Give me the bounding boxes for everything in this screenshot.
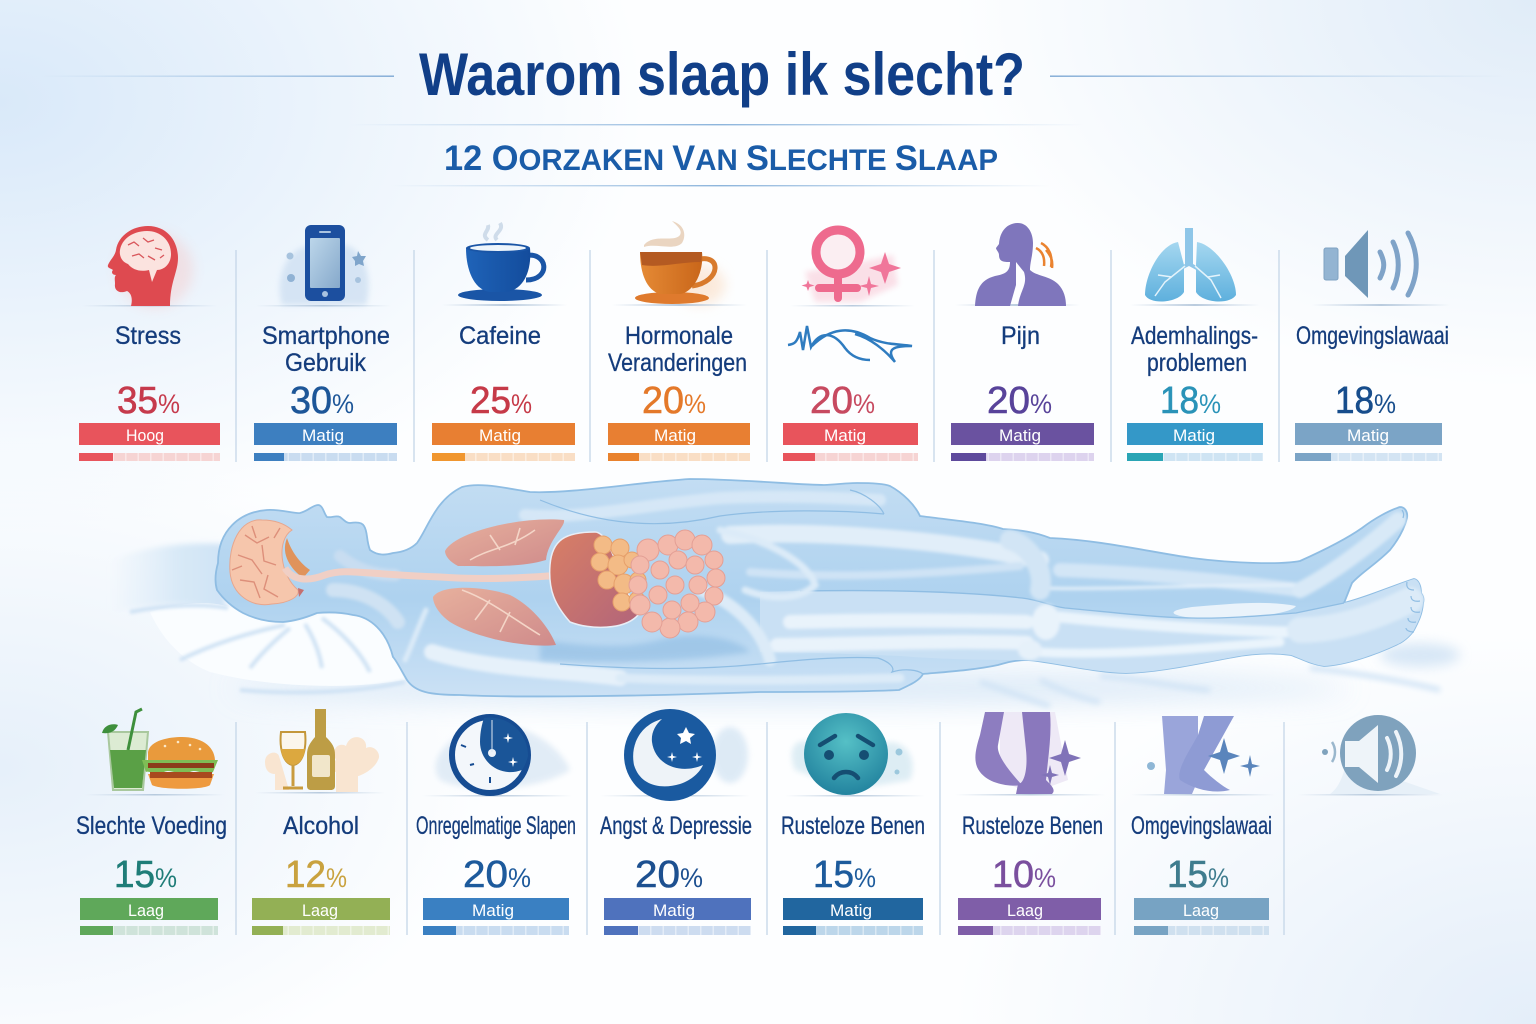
severity bar: Matig bbox=[479, 427, 521, 445]
percentage: 20 bbox=[810, 380, 853, 422]
severity bar: Laag bbox=[128, 902, 164, 920]
stomach bbox=[591, 536, 646, 611]
icon: female symbol bbox=[802, 230, 901, 298]
panel: smartphone bbox=[254, 225, 397, 461]
severity bar: Laag bbox=[1007, 902, 1043, 920]
icon: wine and bottle bbox=[265, 709, 379, 792]
label: Smartphone bbox=[262, 322, 390, 350]
percentage: 18 bbox=[1160, 380, 1199, 422]
severity bar bbox=[432, 423, 575, 445]
label bbox=[608, 322, 747, 377]
panel: stress bbox=[79, 226, 220, 461]
severity bar bbox=[1295, 423, 1442, 445]
percentage bbox=[470, 380, 532, 422]
severity bar bbox=[608, 423, 750, 445]
label: Rusteloze Benen bbox=[781, 812, 925, 840]
severity bar: Matig bbox=[302, 427, 344, 445]
percentage: % bbox=[326, 863, 347, 893]
progress meter bbox=[958, 926, 1101, 935]
progress meter bbox=[432, 453, 575, 461]
spinal cord bbox=[285, 568, 590, 610]
percentage: % bbox=[680, 863, 703, 893]
progress meter bbox=[1127, 453, 1263, 461]
subtitle: 12 OORZAKEN VAN SLECHTE SLAAP bbox=[444, 139, 998, 178]
brain bbox=[230, 520, 310, 605]
percentage bbox=[810, 380, 875, 422]
label: Ademhalings- bbox=[1131, 322, 1258, 350]
label: Rusteloze Benen bbox=[962, 812, 1103, 840]
percentage: % bbox=[684, 389, 706, 419]
severity bar: Matig bbox=[999, 427, 1041, 445]
panel: hormonen vrouw bbox=[783, 230, 918, 461]
severity bar bbox=[783, 898, 923, 920]
panel: rusteloze benen blauw bbox=[781, 713, 925, 935]
lower leg bbox=[760, 579, 1424, 673]
icon: blue boots bbox=[1147, 716, 1260, 794]
lower leg contour bbox=[800, 591, 1344, 618]
panel: cafeine bbox=[432, 223, 575, 461]
label: Stress bbox=[115, 322, 181, 350]
percentage bbox=[987, 380, 1052, 422]
severity bar bbox=[1134, 898, 1269, 920]
shaded torso bbox=[540, 636, 750, 662]
percentage bbox=[813, 854, 876, 896]
label: Angst & Depressie bbox=[600, 812, 752, 840]
percentage: % bbox=[1208, 863, 1229, 893]
icon: coffee cup bbox=[458, 223, 544, 301]
intestines bbox=[629, 530, 725, 638]
severity bar: Matig bbox=[1173, 427, 1215, 445]
percentage: % bbox=[158, 389, 180, 419]
icon: speaker in circle bbox=[1298, 715, 1443, 796]
percentage: 35 bbox=[117, 380, 158, 422]
severity bar bbox=[80, 898, 218, 920]
label: Alcohol bbox=[283, 812, 359, 840]
progress meter bbox=[608, 453, 750, 461]
icon: lungs bbox=[1145, 228, 1236, 301]
percentage bbox=[992, 854, 1056, 896]
panel: pijn bbox=[951, 223, 1094, 461]
label: Omgevingslawaai bbox=[1131, 812, 1272, 840]
percentage: % bbox=[853, 389, 875, 419]
percentage bbox=[1160, 380, 1221, 422]
severity bar bbox=[254, 423, 397, 445]
label bbox=[262, 322, 390, 377]
percentage: 15 bbox=[1167, 854, 1208, 896]
severity bar: Matig bbox=[653, 902, 695, 920]
percentage: 15 bbox=[813, 854, 854, 896]
severity bar bbox=[1127, 423, 1263, 445]
label: Onregelmatige Slapen bbox=[416, 812, 576, 840]
progress meter bbox=[783, 926, 923, 935]
progress meter bbox=[79, 453, 220, 461]
percentage: % bbox=[155, 863, 177, 893]
panel: omgevingslawaai laag bbox=[1130, 716, 1275, 935]
severity bar bbox=[783, 423, 918, 445]
liver bbox=[550, 532, 638, 627]
severity bar: Matig bbox=[824, 427, 866, 445]
percentage bbox=[642, 380, 706, 422]
lung lower bbox=[433, 588, 556, 646]
percentage: 18 bbox=[1335, 380, 1374, 422]
panel: slechte voeding bbox=[76, 709, 227, 935]
percentage: % bbox=[1199, 389, 1221, 419]
progress meter bbox=[604, 926, 751, 935]
label: problemen bbox=[1147, 349, 1247, 377]
percentage: 20 bbox=[642, 380, 684, 422]
percentage: % bbox=[1374, 389, 1396, 419]
progress meter bbox=[80, 926, 218, 935]
progress meter bbox=[1295, 453, 1442, 461]
icon: worried face bbox=[804, 713, 902, 795]
panel: alcohol bbox=[252, 709, 390, 935]
label: Hormonale bbox=[625, 322, 733, 350]
percentage: 12 bbox=[285, 854, 326, 896]
severity bar: Matig bbox=[830, 902, 872, 920]
progress meter bbox=[783, 453, 918, 461]
percentage bbox=[463, 854, 531, 896]
severity bar: Matig bbox=[654, 427, 696, 445]
label: Pijn bbox=[1001, 322, 1040, 350]
percentage: 30 bbox=[290, 380, 332, 422]
percentage bbox=[1167, 854, 1229, 896]
percentage: % bbox=[1034, 863, 1056, 893]
progress meter bbox=[1134, 926, 1269, 935]
percentage: 25 bbox=[470, 380, 511, 422]
percentage: 20 bbox=[635, 854, 680, 896]
panel: rusteloze benen paars bbox=[955, 712, 1105, 935]
severity bar: Matig bbox=[472, 902, 514, 920]
percentage bbox=[1335, 380, 1396, 422]
percentage: 20 bbox=[987, 380, 1030, 422]
panel: omgevingslawaai bbox=[1295, 230, 1450, 461]
illustration: sleeping body bbox=[110, 479, 1460, 706]
severity bar bbox=[951, 423, 1094, 445]
percentage: % bbox=[854, 863, 876, 893]
severity bar bbox=[423, 898, 569, 920]
icon: wave line bbox=[788, 326, 912, 362]
label: Veranderingen bbox=[608, 349, 747, 377]
severity bar: Laag bbox=[302, 902, 338, 920]
percentage bbox=[117, 380, 180, 422]
label bbox=[1131, 322, 1258, 377]
percentage: 20 bbox=[463, 854, 508, 896]
percentage: % bbox=[511, 389, 532, 419]
progress meter bbox=[252, 926, 390, 935]
body silhouette bbox=[215, 479, 1424, 696]
severity bar: Laag bbox=[1183, 902, 1219, 920]
severity bar bbox=[604, 898, 751, 920]
icon: phone bbox=[286, 225, 366, 301]
label: Omgevingslawaai bbox=[1296, 322, 1449, 350]
icon: orange tea cup bbox=[635, 221, 715, 304]
panel: angst en depressie bbox=[600, 709, 752, 935]
progress meter bbox=[423, 926, 569, 935]
gap between the legs bbox=[1174, 603, 1296, 618]
icon: moon with stars bbox=[624, 709, 716, 801]
bones and highlights bbox=[333, 497, 1410, 680]
percentage bbox=[635, 854, 703, 896]
panel: hormonale veranderingen bbox=[608, 221, 750, 461]
icon: green drink and burger bbox=[102, 709, 218, 790]
label: Cafeine bbox=[459, 322, 541, 350]
percentage bbox=[285, 854, 347, 896]
percentage: 15 bbox=[114, 854, 155, 896]
percentage: % bbox=[1030, 389, 1052, 419]
severity bar: Hoog bbox=[126, 427, 164, 445]
percentage: % bbox=[332, 389, 354, 419]
panel: ademhalingsproblemen bbox=[1127, 228, 1263, 461]
lung upper bbox=[445, 519, 564, 566]
icon: speaker bbox=[1324, 230, 1416, 298]
percentage bbox=[290, 380, 354, 422]
label: Gebruik bbox=[285, 349, 366, 377]
severity bar bbox=[79, 423, 220, 445]
icon: person with neck pain bbox=[975, 223, 1066, 306]
percentage bbox=[114, 854, 177, 896]
label: Slechte Voeding bbox=[76, 812, 227, 840]
hand and toe lines bbox=[540, 490, 1420, 674]
panel: onregelmatige slapen bbox=[416, 717, 576, 935]
icon: head with brain bbox=[108, 226, 178, 306]
progress meter bbox=[951, 453, 1094, 461]
progress meter bbox=[254, 453, 397, 461]
title: Waarom slaap ik slecht? bbox=[419, 41, 1025, 108]
icon: purple legs bbox=[975, 712, 1081, 794]
severity bar bbox=[958, 898, 1101, 920]
bed and pillow bbox=[110, 543, 1460, 706]
percentage: 10 bbox=[992, 854, 1034, 896]
severity bar: Matig bbox=[1347, 427, 1389, 445]
severity bar bbox=[252, 898, 390, 920]
icon: moon clock bbox=[452, 717, 528, 793]
percentage: % bbox=[508, 863, 531, 893]
